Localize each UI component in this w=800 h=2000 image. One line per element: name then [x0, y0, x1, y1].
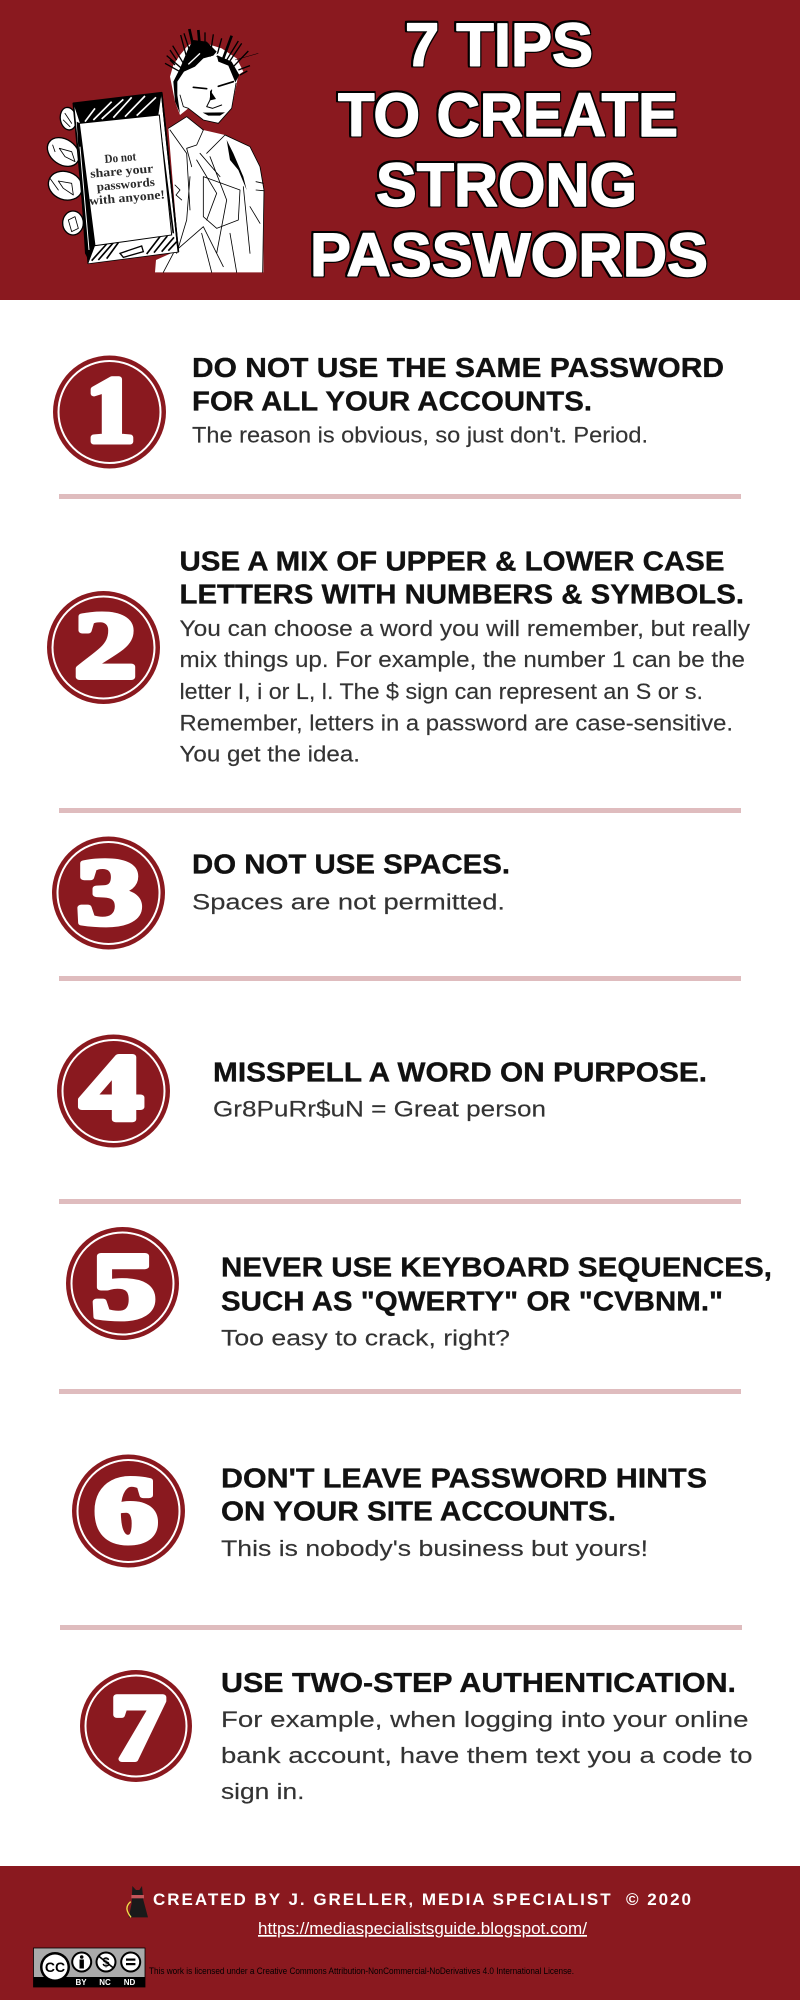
- tip 3 text: [192, 848, 510, 914]
- tip 3 text: DO NOT USE SPACES.: [192, 848, 510, 880]
- badge: number 2: 2: [74, 593, 137, 697]
- tip 5: [66, 1227, 772, 1350]
- website link: https://mediaspecialistsguide.blogspot.com/: [258, 1919, 587, 1938]
- phone: [73, 93, 178, 263]
- tip 2: [47, 546, 750, 766]
- tip 5 text: NEVER USE KEYBOARD SEQUENCES,: [221, 1252, 772, 1282]
- tip 6 text: DON'T LEAVE PASSWORD HINTS: [221, 1462, 707, 1494]
- header banner: [0, 0, 800, 300]
- creative commons badge: BY: [75, 1978, 87, 1987]
- badge: number 4: [57, 1034, 170, 1148]
- phone message: with anyone!: [89, 187, 165, 208]
- tip 6 text: [221, 1462, 707, 1561]
- tip 2 text: You get the idea.: [180, 742, 360, 766]
- tip 2 text: Remember, letters in a password are case-sensitive.: [180, 710, 733, 736]
- tip 7 text: sign in.: [221, 1779, 304, 1804]
- tip 6 text: This is nobody's business but yours!: [221, 1536, 648, 1561]
- tip 2 text: You can choose a word you will remember, but really: [180, 616, 750, 641]
- tip 2 text: USE A MIX OF UPPER & LOWER CASE: [180, 546, 724, 576]
- phone message: Do not: [104, 149, 137, 166]
- badge: number 6: [72, 1454, 185, 1568]
- creative commons badge: NC: [99, 1978, 111, 1987]
- title: TO CREATE: [338, 81, 678, 149]
- tip 4 text: Gr8PuRr$uN = Great person: [213, 1096, 546, 1122]
- creative commons badge: $: [102, 1954, 110, 1970]
- man's torso: [155, 117, 264, 272]
- tip 3: [52, 836, 510, 950]
- badge: number 5: 5: [92, 1235, 156, 1338]
- tip 7 text: USE TWO-STEP AUTHENTICATION.: [221, 1667, 736, 1698]
- credit line: CREATED BY J. GRELLER, MEDIA SPECIALIST © 2020: [153, 1890, 691, 1909]
- tip 3 text: Spaces are not permitted.: [192, 890, 505, 914]
- tip 1 text: FOR ALL YOUR ACCOUNTS.: [192, 386, 592, 416]
- title: STRONG: [376, 151, 637, 219]
- badge: number 3: [52, 836, 165, 950]
- phone message: share your: [89, 161, 154, 181]
- tip 5 text: Too easy to crack, right?: [221, 1326, 510, 1350]
- illustration: man holding phone: [42, 29, 264, 272]
- badge: number 5: [66, 1227, 179, 1340]
- badge: number 3: 3: [77, 840, 142, 944]
- title: 7 TIPS: [405, 11, 593, 79]
- badge: number 7: 7: [111, 1676, 165, 1780]
- tip 5 text: SUCH AS "QWERTY" OR "CVBNM.": [221, 1286, 723, 1316]
- badge: number 2: [47, 591, 160, 704]
- creative commons badge: [34, 1948, 145, 1987]
- title: PASSWORDS: [310, 221, 708, 289]
- phone message: [89, 149, 165, 208]
- badge: number 1: 1: [86, 358, 135, 462]
- tip 2 text: letter I, i or L, l. The $ sign can represent an S or s.: [180, 679, 703, 704]
- tip 4 text: MISSPELL A WORD ON PURPOSE.: [213, 1056, 707, 1088]
- badge: number 4: 4: [80, 1035, 143, 1139]
- tip 6: [72, 1454, 707, 1568]
- phone screen: [79, 115, 172, 246]
- tip 7 text: [221, 1667, 752, 1804]
- tip 1 text: The reason is obvious, so just don't. Period.: [192, 422, 648, 448]
- tip 2 text: [180, 546, 750, 766]
- license note: This work is licensed under a Creative Commons Attribution-NonCommercial-NoDerivatives 4.0 International License.: [149, 1966, 574, 1977]
- tip 4 text: [213, 1056, 707, 1122]
- tip 1 text: [192, 352, 724, 448]
- fingers: [42, 106, 86, 235]
- tip 4: [57, 1034, 707, 1148]
- title: [310, 11, 708, 289]
- creative commons badge: ND: [124, 1978, 135, 1987]
- tip 2 text: LETTERS WITH NUMBERS & SYMBOLS.: [180, 578, 744, 610]
- tip 7 text: bank account, have them text you a code to: [221, 1743, 752, 1768]
- tip 1 text: DO NOT USE THE SAME PASSWORD: [192, 352, 724, 383]
- man's head and spiky hair: [165, 29, 258, 123]
- badge: number 1: [53, 356, 166, 468]
- badge: number 7: [80, 1670, 192, 1782]
- tip 2 text: mix things up. For example, the number 1 can be the: [180, 647, 745, 672]
- footer panel: [0, 1866, 800, 2000]
- tip 6 text: ON YOUR SITE ACCOUNTS.: [221, 1496, 616, 1526]
- tip 7: [80, 1667, 752, 1804]
- tip 1: [53, 352, 724, 468]
- tip 5 text: [221, 1252, 772, 1350]
- phone message: passwords: [96, 175, 156, 194]
- icon: black cat: [127, 1886, 148, 1917]
- tip 7 text: For example, when logging into your online: [221, 1707, 748, 1732]
- creative commons badge: CC: [45, 1959, 65, 1975]
- badge: number 6: 6: [94, 1458, 158, 1563]
